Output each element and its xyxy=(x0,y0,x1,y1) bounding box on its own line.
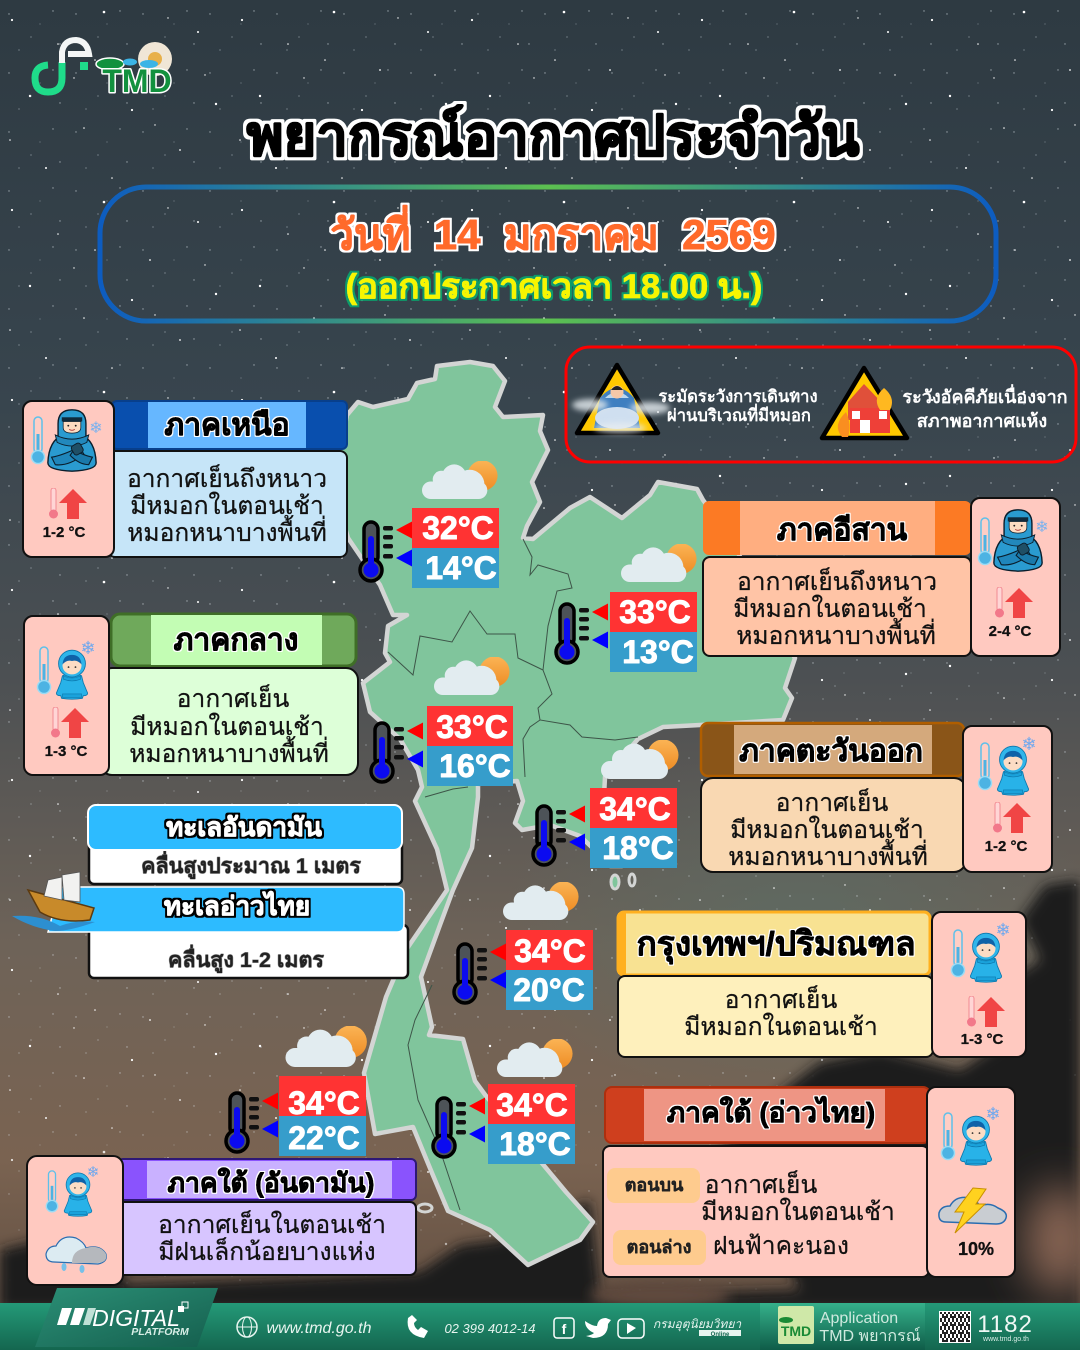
text: fire warning xyxy=(902,384,1068,431)
QR code xyxy=(939,1311,971,1343)
app icon: TMD xyxy=(781,1323,811,1339)
heading: isaan xyxy=(703,501,971,555)
description: bangkok: อากาศเย็น xyxy=(725,984,837,1014)
weather: isaan: 13°C xyxy=(622,634,694,670)
weather: isaan: 33°C xyxy=(619,594,691,630)
andaman sea body xyxy=(89,840,402,884)
heading: north: ภาคเหนือ xyxy=(164,409,290,442)
description: central: อากาศเย็น xyxy=(177,683,289,713)
department name xyxy=(653,1317,742,1338)
description: north: มีหมอกในตอนเช้า xyxy=(130,492,324,520)
icon: fire warning xyxy=(822,368,907,438)
panel: north xyxy=(23,401,347,557)
thermometer xyxy=(533,806,585,865)
panel: central xyxy=(24,614,358,775)
weather: central: 33°C xyxy=(436,709,508,745)
weather: isaan xyxy=(556,544,697,672)
andaman sea heading xyxy=(88,805,402,850)
digital platform badge: DIGITAL xyxy=(92,1305,180,1331)
app text: Application xyxy=(820,1310,898,1327)
weather: south gulf xyxy=(433,1039,575,1164)
tag: upper south xyxy=(607,1168,700,1203)
thermometer xyxy=(556,604,608,663)
app text: TMD พยากรณ์ xyxy=(819,1326,921,1345)
heading: bangkok: กรุงเทพฯ/ปริมณฑล xyxy=(636,926,916,965)
gulf sea body xyxy=(89,925,408,978)
weather: south andaman xyxy=(226,1025,367,1156)
weather: south gulf: 18°C xyxy=(499,1126,571,1162)
panel: isaan xyxy=(703,498,1060,656)
description: bangkok: มีหมอกในตอนเช้า xyxy=(684,1013,878,1041)
heading: east: ภาคตะวันออก xyxy=(739,735,923,768)
icon card: east: ❄ xyxy=(1021,734,1037,754)
heading: east xyxy=(701,723,964,776)
description: isaan: มีหมอกในตอนเช้า xyxy=(733,595,927,623)
description: south gulf: มีหมอกในตอนเช้า xyxy=(701,1198,895,1226)
description: central: หมอกหนาบางพื้นที่ xyxy=(129,736,329,768)
description: isaan xyxy=(703,557,971,656)
panel: south andaman xyxy=(27,1156,416,1285)
icon card: bangkok xyxy=(932,912,1026,1057)
icon card: central: ❄ xyxy=(80,638,96,658)
website: www.tmd.go.th xyxy=(267,1320,372,1337)
description: south andaman: อากาศเย็นในตอนเช้า xyxy=(158,1209,386,1239)
icon card: north xyxy=(23,401,114,557)
hotline: www.tmd.go.th xyxy=(982,1336,1029,1343)
thermometer xyxy=(371,722,423,782)
description: south andaman xyxy=(118,1202,416,1275)
icon: ship xyxy=(12,872,95,931)
icon card: east xyxy=(963,726,1052,872)
tag: upper south: ตอนบน xyxy=(625,1175,684,1195)
heading: south gulf: ภาคใต้ (อ่าวไทย) xyxy=(667,1096,875,1128)
heading: central xyxy=(111,614,356,666)
gulf sea body: คลื่นสูง 1-2 เมตร xyxy=(168,944,324,974)
date heading: วันที่ 14 มกราคม 2569 xyxy=(330,205,776,258)
icon card: isaan: 2-4 °C xyxy=(989,623,1032,640)
icon card: south gulf: ❄ xyxy=(985,1104,1001,1124)
andaman sea heading: ทะเลอันดามัน xyxy=(166,812,322,842)
description: north: หมอกหนาบางพื้นที่ xyxy=(127,515,327,547)
description: south gulf: ฝนฟ้าคะนอง xyxy=(713,1233,849,1260)
panel: bangkok xyxy=(618,912,1026,1057)
weather: east: 18°C xyxy=(602,830,674,866)
heading: south andaman xyxy=(118,1159,416,1200)
hotline: 1182 xyxy=(977,1311,1033,1338)
phone: 02 399 4012-14 xyxy=(444,1321,536,1336)
weather: north: 14°C xyxy=(425,550,497,586)
panel: south gulf xyxy=(603,1087,1015,1277)
icon card: north: 1-2 °C xyxy=(43,524,86,541)
footer bar xyxy=(0,1288,1080,1350)
department name: Online xyxy=(711,1332,730,1338)
icon card: isaan xyxy=(971,498,1060,656)
description: isaan: อากาศเย็นถึงหนาว xyxy=(737,566,937,596)
warning panel xyxy=(566,347,1076,462)
weather: east: 34°C xyxy=(599,791,671,827)
logo: DF and TMD xyxy=(35,40,172,99)
weather: south gulf: 34°C xyxy=(496,1087,568,1123)
heading: central: ภาคกลาง xyxy=(174,624,298,657)
heading: north xyxy=(112,401,347,449)
icon card: south gulf xyxy=(927,1087,1015,1277)
weather: north: 32°C xyxy=(422,510,494,546)
description: isaan: หมอกหนาบางพื้นที่ xyxy=(736,618,936,650)
weather: central xyxy=(371,657,513,786)
description: south gulf: อากาศเย็น xyxy=(705,1169,817,1199)
department name: กรมอุตุนิยมวิทยา xyxy=(653,1317,742,1332)
text: fog warning xyxy=(658,387,818,425)
logo: DF and TMD: TMD xyxy=(102,63,172,99)
phone xyxy=(408,1315,536,1338)
social icons: f xyxy=(562,1321,567,1337)
digital platform badge: PLATFORM xyxy=(131,1326,189,1338)
title: พยากรณ์อากาศประจำวัน xyxy=(247,104,859,167)
description: south gulf xyxy=(603,1146,929,1277)
description: central: มีหมอกในตอนเช้า xyxy=(130,713,324,741)
thermometer xyxy=(454,944,506,1003)
social icons xyxy=(554,1318,644,1338)
text: fog warning: ผ่านบริเวณที่มีหมอก xyxy=(667,403,811,425)
description: east: มีหมอกในตอนเช้า xyxy=(730,816,924,844)
weather: bangkok: 20°C xyxy=(513,972,585,1008)
icon card: north: ❄ xyxy=(89,420,103,437)
heading: bangkok xyxy=(618,912,930,975)
thermometer xyxy=(433,1098,485,1157)
weather: central: 16°C xyxy=(439,748,511,784)
weather: north xyxy=(360,461,499,588)
description: north: อากาศเย็นถึงหนาว xyxy=(127,463,327,493)
heading: isaan: ภาคอีสาน xyxy=(777,514,908,547)
digital platform badge xyxy=(35,1288,218,1347)
tag: lower south xyxy=(613,1230,706,1265)
tag: lower south: ตอนล่าง xyxy=(627,1237,691,1257)
map of Thailand xyxy=(337,362,795,1265)
icon card: east: 1-2 °C xyxy=(985,838,1028,855)
icon card: isaan: ❄ xyxy=(1035,519,1049,536)
text: fire warning: สภาพอากาศแห้ง xyxy=(917,411,1047,431)
app text xyxy=(819,1310,921,1345)
thermometer xyxy=(360,522,412,581)
icon card: south gulf: 10% xyxy=(958,1239,994,1259)
weather: bangkok: 34°C xyxy=(514,933,586,969)
panel: sea forecast xyxy=(12,805,408,978)
app icon xyxy=(778,1306,814,1344)
text: fog warning: ระมัดระวังการเดินทาง xyxy=(658,387,818,406)
icon card: central: 1-3 °C xyxy=(45,743,88,760)
description: east: อากาศเย็น xyxy=(776,787,888,817)
weather: south andaman: 34°C xyxy=(288,1085,360,1121)
heading: south gulf xyxy=(605,1087,930,1143)
weather: east xyxy=(533,740,678,868)
description: east xyxy=(701,778,966,872)
icon card: bangkok: 1-3 °C xyxy=(961,1031,1004,1048)
gulf sea heading xyxy=(48,887,404,932)
icon card: south andaman: ❄ xyxy=(87,1164,99,1181)
andaman sea body: คลื่นสูงประมาณ 1 เมตร xyxy=(141,850,361,880)
icon card: central xyxy=(24,616,109,775)
icon: fog warning xyxy=(572,365,670,433)
heading: south andaman: ภาคใต้ (อันดามัน) xyxy=(168,1167,374,1198)
text: fire warning: ระวังอัคคีภัยเนื่องจาก xyxy=(902,384,1068,407)
weather: bangkok xyxy=(454,882,593,1010)
description: north xyxy=(108,451,347,557)
description: central xyxy=(100,668,358,775)
panel: east xyxy=(701,723,1052,872)
gulf sea heading: ทะเลอ่าวไทย xyxy=(164,890,310,921)
icon card: bangkok: ❄ xyxy=(995,920,1011,940)
thermometer xyxy=(226,1092,278,1152)
icon card: south andaman xyxy=(27,1156,123,1285)
description: east: หมอกหนาบางพื้นที่ xyxy=(728,839,928,871)
issue time: (ออกประกาศเวลา 18.00 น.) xyxy=(346,268,762,306)
website xyxy=(237,1317,372,1337)
description: bangkok xyxy=(618,976,933,1057)
weather: south andaman: 22°C xyxy=(288,1120,360,1156)
date panel xyxy=(100,187,996,321)
description: south andaman: มีฝนเล็กน้อยบางแห่ง xyxy=(158,1236,376,1266)
